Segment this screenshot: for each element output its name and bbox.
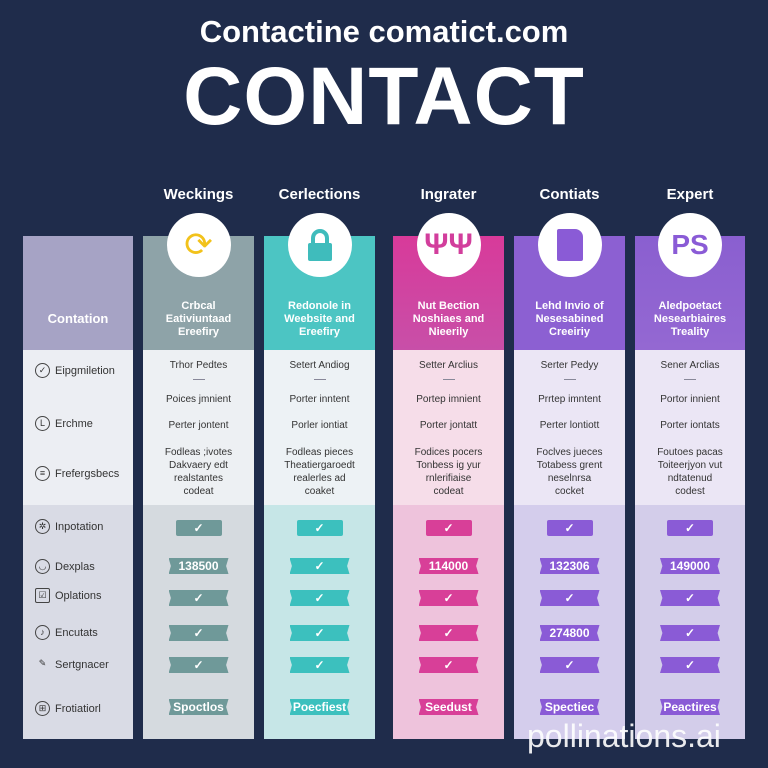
panel: Contiats column: ✓: [564, 658, 575, 672]
panel: Expert column: codest: [675, 486, 705, 497]
panel: Ingrater column: ✓: [443, 658, 454, 672]
label rows: Eipgmiletion: [55, 364, 115, 376]
icon: fork: [416, 213, 480, 277]
panel: Weckings column: Perter jontent: [168, 420, 229, 431]
panel: Expert column: ✓: [685, 658, 695, 672]
panel: Contiats column: Serter Pedyy: [541, 360, 598, 371]
label rows: ⊞: [39, 703, 46, 713]
panel: Ingrater column: Tonbess ig yur: [416, 460, 481, 471]
panel: Cerlections column: Fodleas pieces: [286, 447, 353, 458]
panel: Weckings column: codeat: [183, 486, 214, 497]
panel: Contiats column: [514, 186, 625, 739]
title: Contactine comatict.com: [200, 14, 568, 49]
panel: Ingrater column: ✓: [443, 626, 454, 640]
label rows: Frotiatiorl: [55, 702, 101, 714]
label rows: Inpotation: [55, 520, 103, 532]
label rows: ✎: [39, 658, 46, 668]
panel: Cerlections column: Porler iontiat: [291, 420, 348, 431]
panel: Expert column: Foutoes pacas: [657, 447, 723, 458]
panel: Cerlections column: realerles ad: [293, 473, 346, 484]
panel: Contiats column: Creeiriy: [549, 326, 590, 338]
text: Ingrater: [421, 186, 476, 203]
panel: Expert column: Sener Arclias: [661, 360, 719, 371]
panel: Ingrater column: [393, 186, 504, 739]
panel: Ingrater column: Noshiaes and: [413, 313, 484, 325]
text: Cerlections: [279, 186, 360, 203]
panel: Cerlections column: Ereefiry: [299, 326, 340, 338]
panel: Contiats column: Spectiec: [545, 700, 594, 714]
panel: Weckings column: Dakvaery edt: [169, 460, 228, 471]
label rows: ♪: [40, 627, 45, 637]
panel: Expert column: [635, 186, 745, 739]
panel: Expert column: ✓: [685, 521, 695, 535]
panel: Cerlections column: Weebsite and: [284, 313, 355, 325]
label rows: ☑: [38, 590, 47, 600]
panel: Cerlections column: ✓: [314, 559, 325, 573]
panel: Cerlections column: Setert Andiog: [289, 360, 350, 371]
panel: Weckings column: ✓: [193, 658, 204, 672]
panel: Ingrater column: Fodices pocers: [415, 447, 482, 458]
panel: Weckings column: Crbcal: [181, 300, 216, 312]
label rows: L: [40, 418, 45, 428]
label rows: Erchme: [55, 418, 93, 430]
label rows: Dexplas: [55, 560, 95, 572]
heading: CONTACT: CONTACT: [183, 51, 585, 142]
panel: Expert column: 149000: [670, 559, 710, 573]
panel: Contiats column: ✓: [564, 591, 575, 605]
label rows: ≡: [40, 468, 45, 478]
panel: Expert column: Peactires: [663, 700, 717, 714]
panel: Weckings column: Fodleas ;ivotes: [165, 447, 232, 458]
panel: Expert column: ndtatenud: [668, 473, 712, 484]
panel: Expert column: Toiteerjyon vut: [658, 460, 722, 471]
panel: Weckings column: [143, 186, 254, 739]
watermark: pollinations.ai: [527, 718, 721, 754]
panel: Contiats column: Nesesabined: [536, 313, 603, 325]
panel: Cerlections column: ✓: [314, 521, 325, 535]
panel: Ingrater column: Nieerily: [429, 326, 468, 338]
text: Expert: [667, 186, 713, 203]
panel: Cerlections column: Porter inntent: [289, 394, 350, 405]
panel: Cerlections column: Theatiergaroedt: [284, 460, 355, 471]
label rows: Frefergsbecs: [55, 468, 119, 480]
panel: Cerlections column: ✓: [314, 626, 325, 640]
panel: Weckings column: 138500: [178, 559, 219, 573]
text: Contiats: [540, 186, 600, 203]
label rows: ✲: [39, 521, 46, 531]
label rows: ✓: [39, 365, 46, 375]
panel: Weckings column: realstantes: [174, 473, 223, 484]
panel: Cerlections column: ✓: [314, 591, 325, 605]
icon: document: [538, 213, 602, 277]
panel: Cerlections column: Redonole in: [288, 300, 351, 312]
panel: Weckings column: ✓: [193, 521, 204, 535]
panel: Expert column: Porter iontats: [660, 420, 720, 431]
panel: Weckings column: ✓: [193, 591, 204, 605]
panel: Weckings column: Trhor Pedtes: [170, 360, 227, 371]
panel: Ingrater column: ✓: [443, 591, 454, 605]
panel: Cerlections column: [264, 186, 375, 739]
panel: Weckings column: Eativiuntaad: [166, 313, 231, 325]
panel: Weckings column: ✓: [193, 626, 204, 640]
icon: magnifier: [166, 213, 230, 277]
panel: Cerlections column: Poecfiest: [293, 700, 346, 714]
panel: Expert column: Portor innient: [660, 394, 720, 405]
panel: Ingrater column: Porter jontatt: [420, 420, 477, 431]
panel: Expert column: ✓: [685, 591, 695, 605]
panel: label column: [23, 236, 133, 739]
text: Weckings: [164, 186, 233, 203]
label rows: Oplations: [55, 590, 101, 602]
panel: Ingrater column: rnlerifiaise: [426, 473, 471, 484]
icon: magnifier: ⟳: [184, 226, 213, 264]
panel: Weckings column: Spoctlos: [173, 700, 224, 714]
icon: PS: PS: [671, 229, 709, 260]
panel: Ingrater column: 114000: [429, 559, 468, 573]
panel: Contiats column: 132306: [549, 559, 590, 573]
label rows: Sertgnacer: [55, 658, 109, 670]
panel: Ingrater column: Nut Bection: [418, 300, 479, 312]
panel: Expert column: Treality: [671, 326, 709, 338]
panel: Contiats column: cocket: [555, 486, 584, 497]
panel: Contiats column: Prrtep imntent: [538, 394, 601, 405]
panel: Contiats column: Totabess grent: [537, 460, 602, 471]
icon: padlock: [288, 213, 352, 277]
panel: Ingrater column: codeat: [433, 486, 464, 497]
panel: Contiats column: ✓: [564, 521, 575, 535]
icon: fork: ΨΨ: [424, 228, 473, 261]
label rows: [35, 363, 119, 716]
panel: Cerlections column: coaket: [305, 486, 334, 497]
panel: Expert column: ✓: [685, 626, 695, 640]
panel: label column: Contation: [48, 311, 108, 326]
panel: Weckings column: Ereefiry: [178, 326, 219, 338]
panel: Cerlections column: ✓: [314, 658, 325, 672]
icon: PS: [658, 213, 722, 277]
label rows: Encutats: [55, 626, 98, 638]
panel: Weckings column: Poices jmnient: [166, 394, 231, 405]
panel: Contiats column: Lehd Invio of: [535, 300, 604, 312]
panel: Ingrater column: Seedust: [425, 700, 472, 714]
label rows: ◡: [39, 561, 46, 571]
panel: Contiats column: Foclves jueces: [536, 447, 603, 458]
panel: Contiats column: Perter lontiott: [540, 420, 599, 431]
panel: Ingrater column: Setter Arclius: [419, 360, 478, 371]
panel: Ingrater column: ✓: [443, 521, 454, 535]
panel: Expert column: Aledpoetact: [659, 300, 721, 312]
panel: Contiats column: 274800: [549, 626, 590, 640]
panel: Contiats column: neselnrsa: [548, 473, 591, 484]
panel: Ingrater column: Portep imnient: [416, 394, 481, 405]
panel: Expert column: Nesearbiaires: [654, 313, 726, 325]
